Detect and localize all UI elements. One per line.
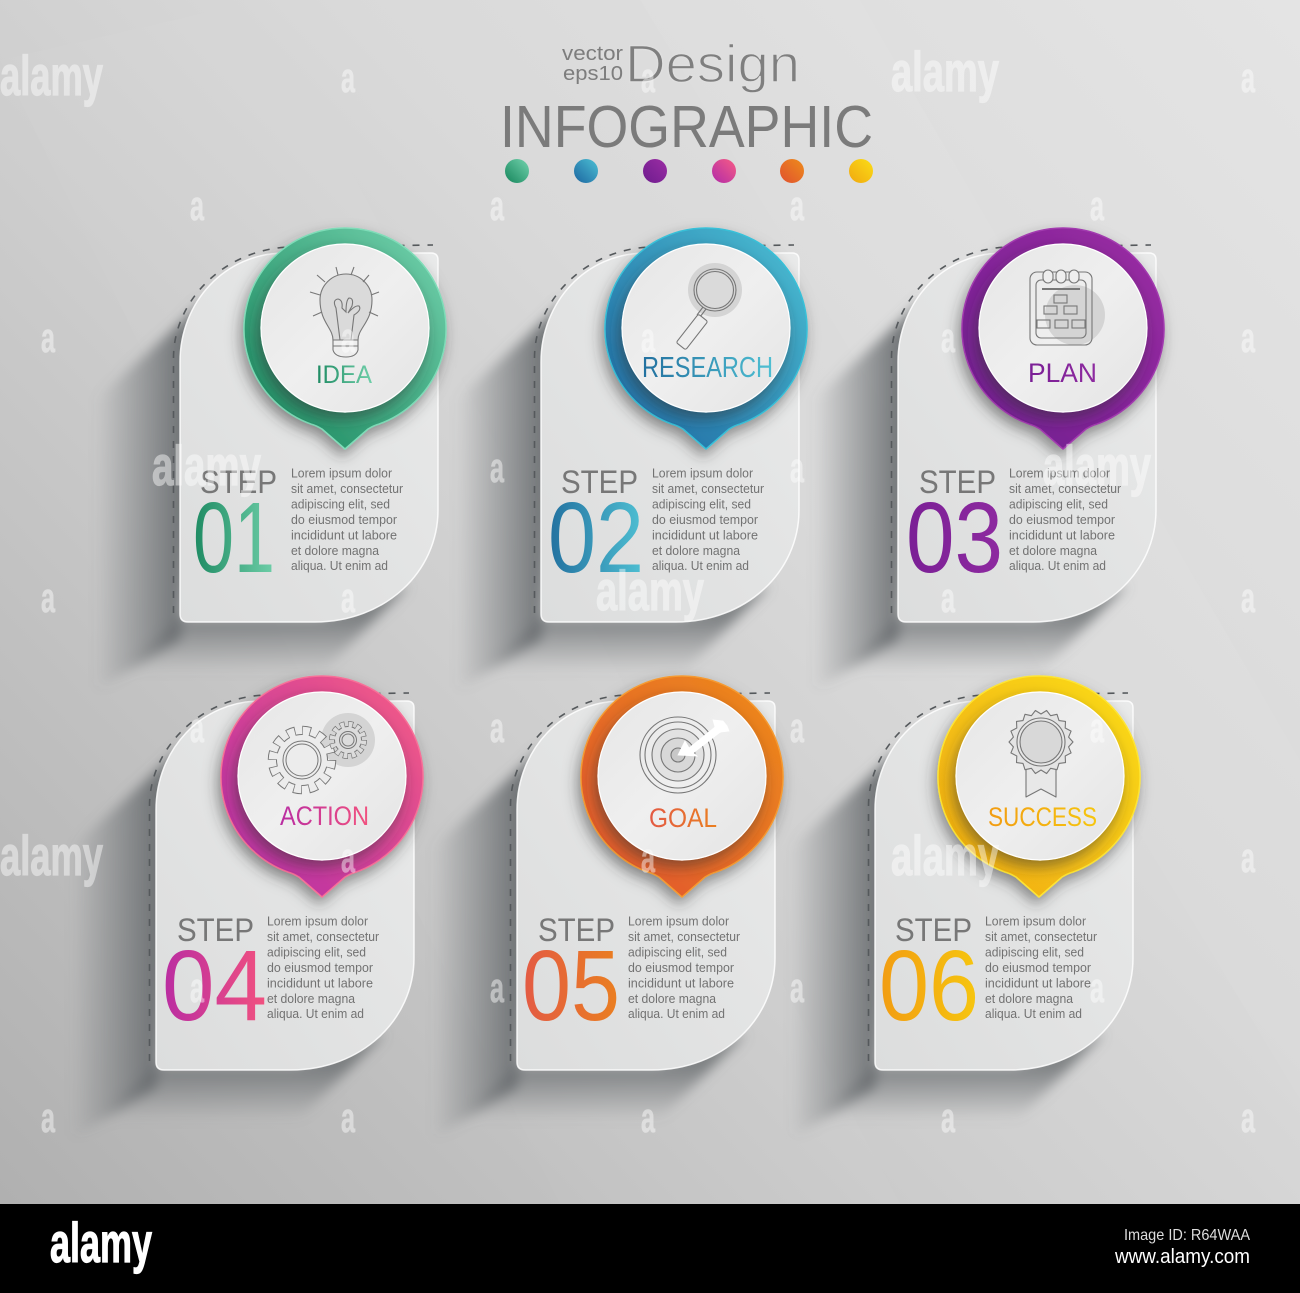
panel: step 06 success bbox=[791, 676, 1140, 1138]
dashed outline bbox=[510, 693, 770, 1061]
footer bar bbox=[0, 1204, 1300, 1293]
body text: do eiusmod tempor bbox=[291, 513, 397, 527]
body text: Lorem ipsum dolor bbox=[291, 466, 392, 480]
title block bbox=[500, 35, 873, 183]
watermarks: alamy bbox=[0, 824, 103, 887]
watermarks: alamy bbox=[0, 44, 103, 107]
body text: do eiusmod tempor bbox=[652, 513, 758, 527]
body text: incididunt ut labore bbox=[291, 528, 397, 542]
step number: 02 bbox=[548, 482, 644, 594]
body text: et dolore magna bbox=[267, 992, 355, 1006]
colour dots bbox=[505, 159, 873, 183]
card body bbox=[156, 701, 414, 1070]
watermarks: a bbox=[941, 1094, 955, 1141]
body text: aliqua. Ut enim ad bbox=[1009, 559, 1106, 573]
body text bbox=[652, 466, 764, 573]
dashed outline bbox=[150, 693, 409, 1061]
body text: adipiscing elit, sed bbox=[1009, 498, 1108, 512]
icon: award badge bbox=[1009, 710, 1073, 797]
body text: Lorem ipsum dolor bbox=[267, 914, 368, 928]
label: SUCCESS: SUCCESS bbox=[988, 802, 1097, 832]
icon: magnifier bbox=[676, 263, 742, 350]
white disc bbox=[956, 692, 1124, 860]
card body bbox=[898, 253, 1156, 622]
label: vector eps10 bbox=[562, 43, 623, 85]
body text: sit amet, consectetur bbox=[628, 930, 740, 944]
step number: 05 bbox=[522, 930, 620, 1042]
watermarks: a bbox=[341, 574, 355, 621]
body text: sit amet, consectetur bbox=[985, 930, 1097, 944]
body text: incididunt ut labore bbox=[628, 976, 734, 990]
body text: et dolore magna bbox=[652, 544, 740, 558]
body text: do eiusmod tempor bbox=[267, 961, 373, 975]
body text: sit amet, consectetur bbox=[652, 482, 764, 496]
body text: incididunt ut labore bbox=[1009, 528, 1115, 542]
watermarks: a bbox=[790, 444, 804, 491]
watermarks: a bbox=[641, 834, 655, 881]
watermarks: a bbox=[190, 964, 204, 1011]
watermarks: alamy bbox=[891, 40, 999, 103]
body text: Lorem ipsum dolor bbox=[985, 914, 1086, 928]
pin marker bbox=[962, 228, 1164, 449]
card shadow bbox=[96, 300, 410, 690]
body text bbox=[1009, 466, 1121, 573]
icon: planner notebook bbox=[1030, 270, 1105, 345]
pin marker bbox=[938, 676, 1140, 897]
watermarks: a bbox=[490, 444, 504, 491]
icon: target with arrow bbox=[640, 717, 729, 793]
step number: 01 bbox=[193, 482, 275, 594]
body text: aliqua. Ut enim ad bbox=[291, 559, 388, 573]
panel: step 05 goal bbox=[433, 676, 783, 1138]
watermarks: a bbox=[490, 182, 504, 229]
body text bbox=[267, 914, 379, 1021]
body text: do eiusmod tempor bbox=[985, 961, 1091, 975]
watermarks: a bbox=[790, 182, 804, 229]
watermarks: a bbox=[1241, 834, 1255, 881]
body text: et dolore magna bbox=[1009, 544, 1097, 558]
body text: et dolore magna bbox=[985, 992, 1073, 1006]
watermarks: a bbox=[941, 314, 955, 361]
card body bbox=[180, 253, 438, 622]
watermarks: a bbox=[1090, 964, 1104, 1011]
body text: et dolore magna bbox=[291, 544, 379, 558]
card body bbox=[517, 701, 775, 1070]
watermarks: a bbox=[490, 704, 504, 751]
label: vector eps10: eps10 bbox=[563, 63, 623, 85]
body text: do eiusmod tempor bbox=[628, 961, 734, 975]
body text: adipiscing elit, sed bbox=[628, 946, 727, 960]
body text: incididunt ut labore bbox=[985, 976, 1091, 990]
body text: incididunt ut labore bbox=[652, 528, 758, 542]
label: PLAN: PLAN bbox=[1028, 358, 1097, 388]
watermarks: a bbox=[641, 314, 655, 361]
label: vector eps10: vector bbox=[562, 43, 623, 65]
white disc bbox=[238, 692, 406, 860]
watermarks: a bbox=[1241, 314, 1255, 361]
body text: Lorem ipsum dolor bbox=[628, 914, 729, 928]
watermarks: a bbox=[1241, 54, 1255, 101]
watermarks: alamy bbox=[1043, 434, 1151, 497]
website: www.alamy.com bbox=[1114, 1246, 1250, 1268]
step number: 04 bbox=[162, 930, 267, 1042]
dashed outline bbox=[534, 245, 794, 613]
watermarks: alamy bbox=[891, 824, 999, 887]
card shadow bbox=[791, 748, 1105, 1138]
watermarks: a bbox=[41, 574, 55, 621]
body text: do eiusmod tempor bbox=[1009, 513, 1115, 527]
body text: adipiscing elit, sed bbox=[291, 498, 390, 512]
step label: STEP bbox=[895, 912, 972, 948]
watermarks: alamy bbox=[152, 434, 261, 497]
body text: sit amet, consectetur bbox=[291, 482, 403, 496]
body text bbox=[291, 466, 403, 573]
watermarks: a bbox=[190, 704, 204, 751]
step number: 03 bbox=[906, 482, 1003, 594]
panel: step 01 idea bbox=[96, 228, 446, 690]
heading: Design: Design bbox=[625, 35, 800, 94]
watermarks: a bbox=[41, 1094, 55, 1141]
watermarks: a bbox=[341, 1094, 355, 1141]
body text: et dolore magna bbox=[628, 992, 716, 1006]
step label: STEP bbox=[919, 464, 996, 500]
watermarks: a bbox=[641, 54, 655, 101]
dashed outline bbox=[174, 245, 433, 613]
watermarks: a bbox=[490, 964, 504, 1011]
icon: gears bbox=[272, 713, 375, 790]
body text bbox=[628, 914, 740, 1021]
body text: adipiscing elit, sed bbox=[652, 498, 751, 512]
card shadow bbox=[457, 300, 771, 690]
body text: incididunt ut labore bbox=[267, 976, 373, 990]
step label: STEP bbox=[538, 912, 615, 948]
watermarks: a bbox=[1090, 182, 1104, 229]
body text: aliqua. Ut enim ad bbox=[628, 1007, 725, 1021]
step label: STEP bbox=[200, 464, 277, 500]
watermarks: a bbox=[641, 1094, 655, 1141]
watermarks: a bbox=[941, 574, 955, 621]
heading: INFOGRAPHIC: INFOGRAPHIC bbox=[500, 94, 873, 160]
panel: step 04 action bbox=[72, 676, 423, 1138]
footer logo: alamy bbox=[50, 1211, 152, 1274]
label: GOAL: GOAL bbox=[649, 803, 717, 833]
card shadow bbox=[433, 748, 747, 1138]
white disc bbox=[598, 692, 766, 860]
card body bbox=[541, 253, 799, 622]
pin marker bbox=[244, 228, 446, 449]
body text: sit amet, consectetur bbox=[1009, 482, 1121, 496]
label: IDEA: IDEA bbox=[316, 361, 372, 389]
panel: step 03 plan bbox=[814, 228, 1164, 690]
watermarks: a bbox=[341, 834, 355, 881]
watermarks: a bbox=[190, 182, 204, 229]
watermarks: a bbox=[341, 54, 355, 101]
pin marker bbox=[581, 676, 783, 897]
label: ACTION: ACTION bbox=[280, 801, 369, 831]
body text: adipiscing elit, sed bbox=[985, 946, 1084, 960]
watermarks: a bbox=[1241, 574, 1255, 621]
watermarks: a bbox=[1241, 1094, 1255, 1141]
step number: 06 bbox=[879, 930, 979, 1042]
body text bbox=[985, 914, 1097, 1021]
watermarks: a bbox=[1090, 704, 1104, 751]
step label: STEP bbox=[177, 912, 254, 948]
image id: Image ID: R64WAA bbox=[1124, 1227, 1250, 1244]
watermarks: a bbox=[341, 314, 355, 361]
white disc bbox=[622, 244, 790, 412]
pin marker bbox=[605, 228, 807, 449]
card shadow bbox=[814, 300, 1128, 690]
step label: STEP bbox=[561, 464, 638, 500]
watermarks: alamy bbox=[596, 559, 704, 622]
white disc bbox=[979, 244, 1147, 412]
white disc bbox=[261, 244, 429, 412]
body text: aliqua. Ut enim ad bbox=[267, 1007, 364, 1021]
panel: step 02 research bbox=[457, 228, 807, 690]
card body bbox=[875, 701, 1133, 1070]
dashed outline bbox=[868, 693, 1128, 1061]
pin marker bbox=[221, 676, 423, 897]
watermarks: a bbox=[41, 314, 55, 361]
label: RESEARCH: RESEARCH bbox=[642, 352, 773, 384]
body text: Lorem ipsum dolor bbox=[652, 466, 753, 480]
body text: adipiscing elit, sed bbox=[267, 946, 366, 960]
body text: aliqua. Ut enim ad bbox=[652, 559, 749, 573]
watermarks: a bbox=[790, 964, 804, 1011]
watermarks: a bbox=[790, 704, 804, 751]
body text: sit amet, consectetur bbox=[267, 930, 379, 944]
body text: aliqua. Ut enim ad bbox=[985, 1007, 1082, 1021]
card shadow bbox=[72, 748, 386, 1138]
icon: light bulb bbox=[310, 267, 379, 357]
dashed outline bbox=[892, 245, 1151, 613]
body text: Lorem ipsum dolor bbox=[1009, 466, 1110, 480]
